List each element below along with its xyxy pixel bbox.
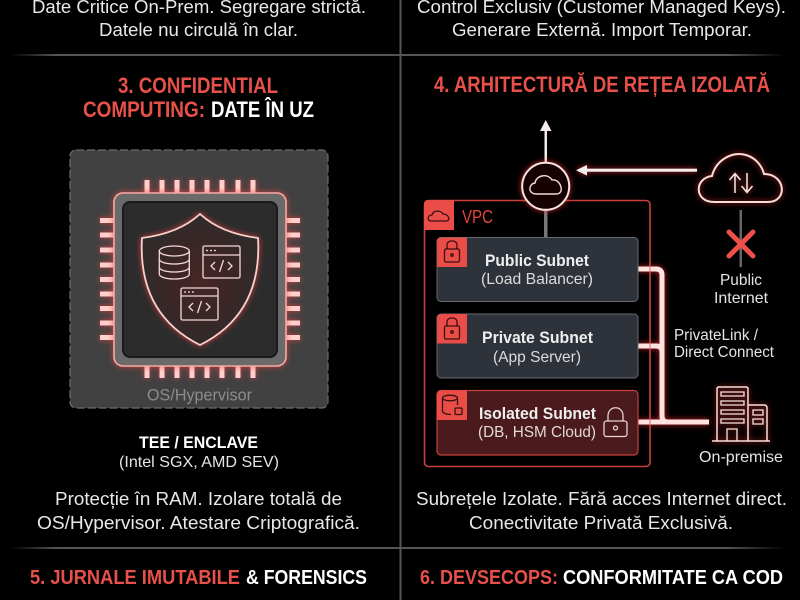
private subnet bbox=[437, 314, 638, 378]
label: Public Internet: Internet bbox=[714, 290, 769, 307]
label: TEE / Enclave bbox=[119, 433, 279, 471]
isolated subnet bbox=[437, 390, 638, 455]
text block: panel 4 description: Conectivitate Privată Exclusivă. bbox=[469, 513, 733, 533]
public subnet: (Load Balancer) bbox=[481, 271, 593, 288]
VPC boundary bbox=[424, 200, 650, 466]
heading: panel 3: COMPUTING: bbox=[83, 97, 205, 122]
private links bbox=[638, 269, 709, 422]
label: Public Internet bbox=[714, 272, 769, 307]
label: PrivateLink / Direct Connect: Direct Connect bbox=[674, 344, 775, 361]
text block: panel 2 description bbox=[417, 0, 786, 40]
private subnet: (App Server) bbox=[493, 349, 581, 366]
panel: OS/Hypervisor chip diagram bbox=[70, 150, 328, 408]
label: PrivateLink / Direct Connect: PrivateLink / bbox=[674, 327, 759, 344]
private subnet: Private Subnet bbox=[482, 329, 593, 347]
connector: gateway to public subnet bbox=[544, 209, 548, 238]
heading: panel 5: & FORENSICS bbox=[246, 567, 367, 589]
text block: panel 3 description: Protecție în RAM. Izolare totală de bbox=[55, 489, 342, 509]
chip pins bbox=[100, 180, 300, 378]
icon: red X bbox=[729, 232, 753, 256]
icon: gateway cloud bbox=[522, 163, 569, 210]
label: On-premise: On-premise bbox=[699, 449, 783, 466]
arrow: from internet bbox=[576, 165, 697, 176]
isolated subnet: Isolated Subnet bbox=[479, 405, 596, 423]
public subnet bbox=[437, 238, 638, 302]
label: OS/Hypervisor: OS/Hypervisor bbox=[147, 386, 252, 404]
text block: panel 3 description: OS/Hypervisor. Atestare Criptografică. bbox=[37, 513, 360, 533]
label: VPC: VPC bbox=[462, 207, 493, 227]
isolated subnet: (DB, HSM Cloud) bbox=[478, 424, 596, 441]
blocked link bbox=[740, 210, 742, 267]
icon: shield bbox=[142, 214, 258, 345]
icon: code window 1 bbox=[203, 246, 240, 278]
icon: internet cloud bbox=[699, 154, 782, 202]
heading: panel 3: 3. CONFIDENTIAL bbox=[118, 73, 278, 98]
icon: building bbox=[712, 387, 770, 441]
text block: panel 3 description bbox=[37, 489, 360, 533]
public subnet: Public Subnet bbox=[485, 252, 589, 270]
text block: panel 4 description: Subrețele Izolate. Fără acces Internet direct. bbox=[416, 489, 787, 509]
text block: panel 4 description bbox=[416, 489, 787, 533]
icon: database bbox=[159, 246, 189, 279]
heading: panel 3 bbox=[83, 73, 314, 122]
label: PrivateLink / Direct Connect bbox=[674, 327, 775, 361]
text block: panel 1 description: Datele nu circulă în clar. bbox=[99, 20, 298, 40]
icon: code window 2 bbox=[181, 288, 218, 320]
text block: panel 2 description: Generare Externă. Import Temporar. bbox=[452, 20, 752, 40]
heading: panel 5 bbox=[30, 567, 367, 589]
TEE enclave bbox=[123, 202, 277, 357]
VPC tab bbox=[424, 200, 454, 230]
icon: VPC cloud bbox=[428, 211, 449, 221]
chip body bbox=[114, 193, 286, 366]
heading: panel 5: 5. JURNALE IMUTABILE bbox=[30, 567, 240, 589]
arrow: up bbox=[540, 120, 552, 163]
label: Public Internet: Public bbox=[720, 272, 762, 289]
panel: network architecture bbox=[424, 120, 783, 466]
label: TEE / Enclave: (Intel SGX, AMD SEV) bbox=[119, 454, 279, 471]
label: TEE / Enclave: TEE / ENCLAVE bbox=[139, 433, 258, 452]
heading: panel 6: 6. DEVSECOPS: bbox=[420, 567, 558, 589]
heading: panel 3: DATE ÎN UZ bbox=[211, 97, 314, 122]
hypervisor box bbox=[70, 150, 328, 408]
heading: panel 6 bbox=[420, 567, 783, 589]
text block: panel 1 description bbox=[32, 0, 366, 40]
heading: panel 6: CONFORMITATE CA COD bbox=[563, 567, 783, 589]
VPC border over links bbox=[649, 262, 651, 432]
